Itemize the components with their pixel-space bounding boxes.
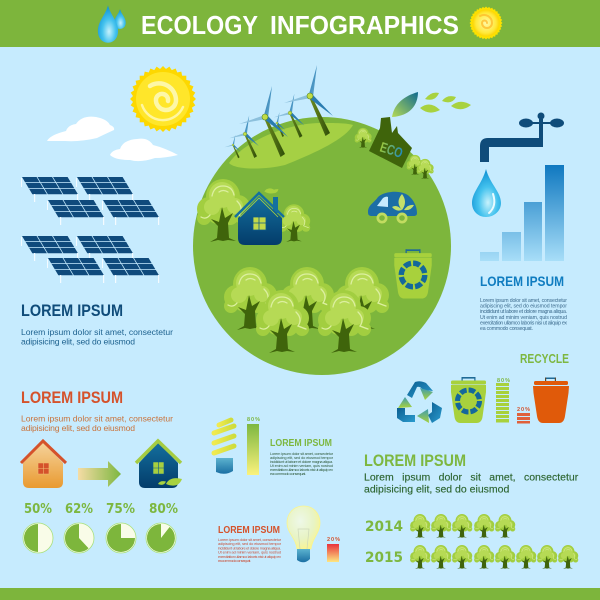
heading: recycle: RECYCLE (520, 352, 569, 366)
tree row: 2014 (410, 514, 515, 538)
text block: bulb red: ea commodo consequat. (218, 558, 251, 563)
text block: bulb green: adipiscing elit, sed do eiusmod tempor (270, 455, 334, 460)
heading: solar: LOREM IPSUM (21, 301, 123, 320)
hill (229, 123, 353, 169)
header bar (0, 0, 600, 47)
percent labels: 62% (65, 501, 93, 517)
icon: orange house (21, 441, 66, 488)
text block: water: ea commodo consequat. (480, 326, 533, 332)
icon: recycle symbol (397, 381, 442, 423)
tree row: 2015 (410, 545, 578, 569)
icon: leaves from chimney (392, 92, 471, 117)
text block: forest: adipisicing elit, sed do eiusmod (364, 484, 509, 496)
title (141, 10, 459, 40)
title: INFOGRAPHICS (270, 10, 459, 40)
icon: orange bin (533, 378, 569, 423)
text block: bulb green: incididunt ut labore et dolore magna aliqua. (270, 459, 333, 464)
heading: bulb green: LOREM IPSUM (270, 438, 332, 449)
text block: energy (21, 414, 173, 433)
icon: blue house (235, 187, 284, 245)
factory with ECO label (369, 117, 412, 168)
bar: 80% (247, 424, 259, 475)
icon: clouds (47, 117, 178, 161)
pie chart: 50% (23, 523, 53, 553)
small trees on globe (355, 128, 434, 179)
text block: bulb red: Lorem ipsum dolor sit amet, consectetur (218, 537, 282, 542)
heading: water: LOREM IPSUM (480, 273, 564, 289)
text block: water (480, 298, 567, 332)
label: recycle 20%: 20% (517, 407, 530, 413)
tree by house right (278, 204, 310, 242)
label: 2015: 2015 (365, 550, 403, 566)
icon: recycle bin on globe (394, 249, 432, 299)
icon: water tap (480, 112, 564, 162)
icon: light bulb (287, 506, 320, 562)
text block: energy: adipisicing elit, sed do eiusmod (21, 423, 135, 433)
icon: sun (130, 66, 196, 132)
text block: solar: Lorem ipsum dolor sit amet, consectetur (21, 327, 173, 337)
heading: forest: LOREM IPSUM (364, 451, 466, 470)
tree by house left (197, 179, 250, 242)
text block: solar: adipisicing elit, sed do eiusmod (21, 336, 135, 346)
pie chart: 62% (64, 523, 94, 553)
bar chart: water (480, 165, 564, 261)
percent labels: 50% (24, 501, 52, 517)
text block: forest: Lorem ipsum dolor sit amet, consectetur (364, 472, 579, 484)
text block: bulb green: exercitation ullamco laboris nisi ut aliquip ex (270, 467, 333, 472)
solar panels (21, 177, 159, 283)
text block: bulb red: incididunt ut labore et dolore magna aliqua. (218, 545, 281, 550)
icon: green bin (451, 377, 486, 423)
text block: energy: Lorem ipsum dolor sit amet, consectetur (21, 414, 173, 424)
text block: bulb green: Ut enim ad minim veniam, quis nostrud (270, 463, 333, 468)
title: ECOLOGY (141, 10, 258, 40)
bar: recycle 20% (517, 413, 530, 424)
globe (193, 117, 451, 375)
heading: energy: LOREM IPSUM (21, 388, 123, 407)
percent labels (24, 501, 178, 517)
text block: forest (364, 472, 579, 496)
text block: water: incididunt ut labore et dolore magna aliqua. (480, 309, 567, 315)
text block: solar (21, 327, 173, 346)
icon: water drop (472, 169, 501, 217)
text block: bulb red: Ut enim ad minim veniam, quis nostrud (218, 550, 281, 555)
label: 80% bar: 80% (247, 417, 260, 423)
label: recycle 80%: 80% (497, 378, 510, 384)
heading: bulb red: LOREM IPSUM (218, 525, 280, 536)
bar: recycle 80% (496, 383, 509, 422)
arrow (78, 461, 121, 487)
wind turbines (224, 65, 333, 158)
text block: water: Ut enim ad minim veniam, quis nostrud (480, 315, 567, 321)
label: 2014: 2014 (365, 519, 403, 535)
bar: 20% (327, 544, 339, 562)
percent labels: 75% (106, 501, 135, 517)
tree group on globe (224, 267, 389, 353)
text block: bulb green: ea commodo consequat. (270, 471, 306, 476)
factory with ECO label: ECO (378, 139, 405, 161)
text block: bulb red (218, 537, 282, 563)
icon: CFL bulb (214, 420, 234, 474)
percent labels: 80% (149, 501, 178, 517)
icon: title sun (470, 7, 502, 39)
text block: water: exercitation ullamco laboris nisi ut aliquip ex (480, 320, 567, 326)
text block: bulb green: Lorem ipsum dolor sit amet, consectetur (270, 451, 334, 456)
icon: eco car (368, 192, 417, 224)
text block: water: Lorem ipsum dolor sit amet, consectetur (480, 298, 567, 304)
pie chart: 80% (146, 523, 176, 553)
label: 20% bar: 20% (327, 537, 340, 543)
icon: title water drops (98, 5, 126, 43)
text block: water: adipiscing elit, sed do eiusmod tempor (480, 304, 567, 310)
text block: bulb green (270, 451, 334, 476)
text block: bulb red: exercitation ullamco laboris nisi ut aliquip ex (218, 554, 281, 559)
footer bar (0, 588, 600, 600)
pie chart: 75% (106, 523, 136, 553)
icon: green house (136, 441, 182, 488)
text block: bulb red: adipiscing elit, sed do eiusmod tempor (218, 541, 282, 546)
